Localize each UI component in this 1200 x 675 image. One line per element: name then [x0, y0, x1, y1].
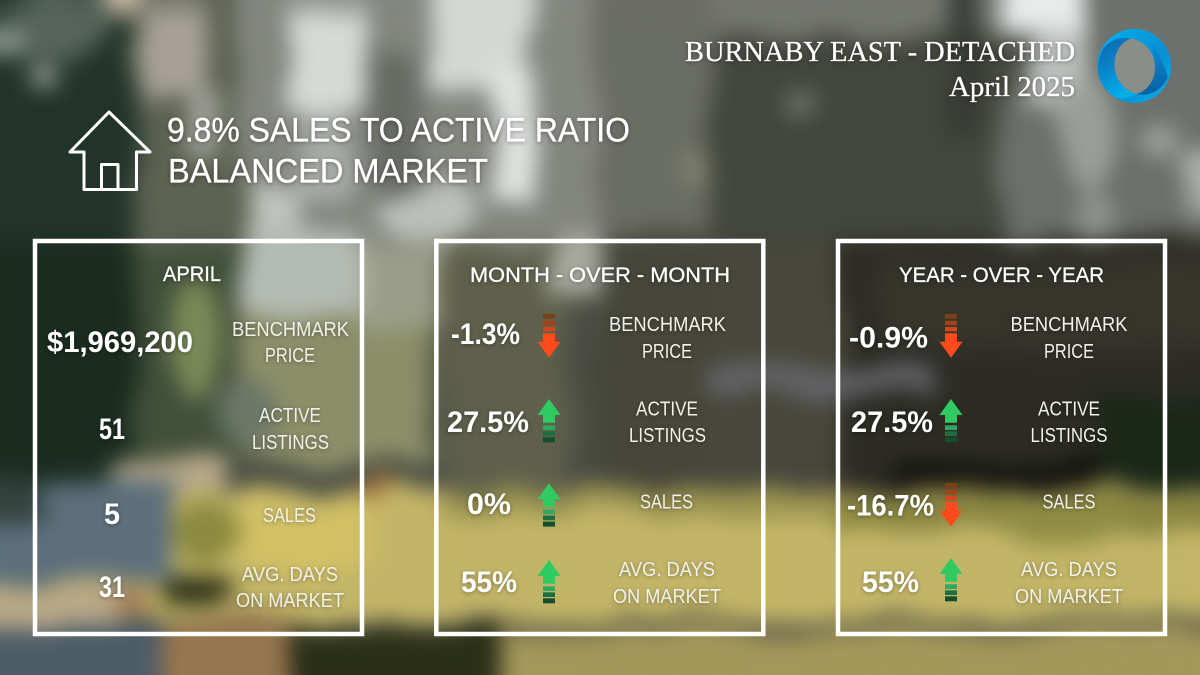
panel: month over month: [436, 241, 763, 634]
panel: April figures: ACTIVE: [259, 405, 321, 427]
panel: month over month: SALES: [640, 492, 693, 514]
panel: April figures: PRICE: [265, 345, 315, 367]
headline: sales to active ratio: [167, 112, 630, 190]
panel: month over month: AVG. DAYS: [619, 559, 715, 581]
panel: month over month: LISTINGS: [629, 425, 706, 447]
panel: year over year: ACTIVE: [1038, 398, 1100, 420]
panel: month over month: ACTIVE: [636, 398, 698, 420]
date: April 2025: [949, 71, 1075, 103]
ground: [0, 490, 1200, 620]
panel: April figures: LISTINGS: [252, 432, 329, 454]
panel: April figures: APRIL: [163, 263, 221, 286]
panel: April figures: BENCHMARK: [232, 319, 350, 341]
panel: year over year: ON MARKET: [1015, 586, 1123, 608]
panel: April figures: ON MARKET: [236, 590, 344, 612]
panel: month over month: 27.5%: [447, 406, 529, 439]
panel: month over month: 55%: [461, 566, 517, 599]
panel: year over year: 27.5%: [851, 406, 933, 439]
panel: month over month: ON MARKET: [613, 586, 721, 608]
panel: April figures: SALES: [263, 505, 316, 527]
panel: year over year: PRICE: [1044, 341, 1094, 363]
panel: month over month: PRICE: [642, 341, 692, 363]
panel: year over year: LISTINGS: [1030, 425, 1108, 447]
headline: sales to active ratio: 9.8% SALES TO ACTIVE RATIO: [167, 112, 630, 150]
market status: BALANCED MARKET: [168, 152, 488, 190]
logo: blue ring: [1097, 29, 1171, 103]
panel: year over year: 55%: [862, 566, 919, 599]
panel: April figures: 31: [99, 571, 125, 604]
panel: month over month: BENCHMARK: [609, 314, 727, 336]
panel: year over year: AVG. DAYS: [1021, 559, 1117, 581]
title: area and property type: BURNABY EAST - DETACHED: [685, 36, 1075, 68]
panel: April figures: [35, 241, 362, 634]
panel: April figures: $1,969,200: [47, 326, 193, 359]
title: area and property type: [685, 36, 1075, 103]
panel: month over month: MONTH - OVER - MONTH: [470, 264, 730, 287]
panel: year over year: -0.9%: [849, 322, 928, 354]
panel: year over year: -16.7%: [847, 490, 934, 522]
icon: house: [70, 112, 150, 190]
panel: month over month: -1.3%: [451, 318, 520, 351]
panel: year over year: [838, 241, 1165, 634]
panel: April figures: 5: [104, 498, 120, 531]
upper tones: [0, 0, 135, 480]
panel: April figures: AVG. DAYS: [242, 564, 338, 586]
panel: April figures: 51: [99, 413, 125, 446]
panel: year over year: BENCHMARK: [1010, 314, 1128, 336]
panel: year over year: SALES: [1042, 492, 1096, 514]
panel: month over month: 0%: [467, 488, 511, 521]
panel: year over year: YEAR - OVER - YEAR: [899, 264, 1104, 287]
mid tones: [0, 240, 135, 470]
